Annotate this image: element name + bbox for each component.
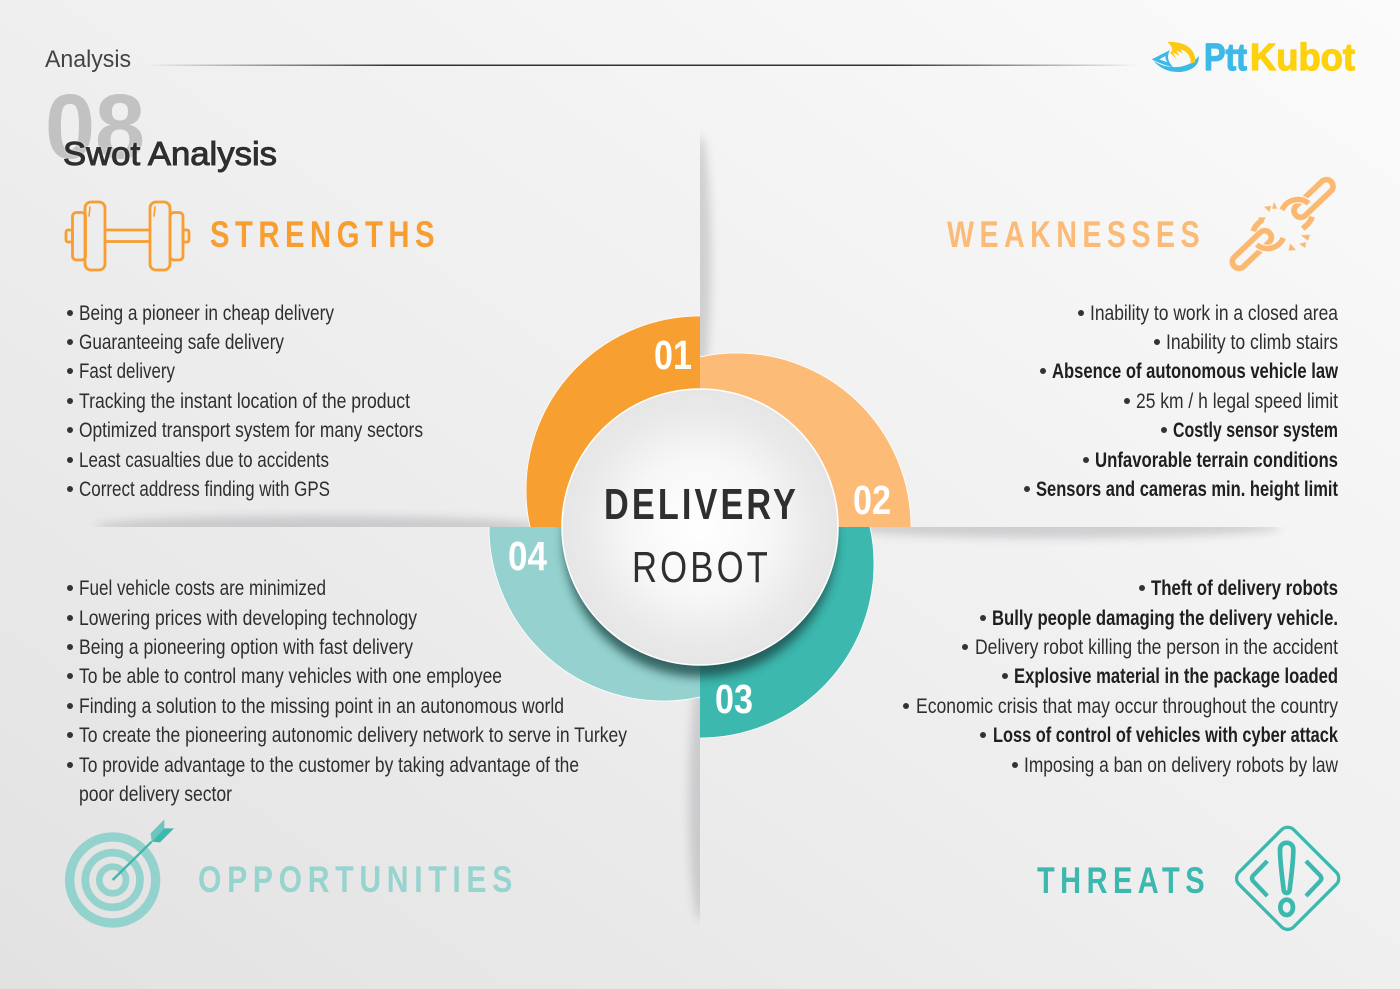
weaknesses list: Costly sensor system bbox=[1173, 418, 1338, 442]
segment 02 bbox=[700, 352, 912, 527]
opportunities list: To provide advantage to the customer by taking advantage of the bbox=[79, 753, 579, 777]
center diagram: four quadrant ring bbox=[489, 316, 911, 738]
icon: broken chain bbox=[1232, 180, 1333, 268]
heading: strengths: STRENGTHS bbox=[210, 214, 440, 255]
opportunities list: Finding a solution to the missing point in an autonomous world bbox=[79, 694, 564, 718]
weaknesses list: Inability to work in a closed area bbox=[1090, 301, 1338, 325]
strengths list: Guaranteeing safe delivery bbox=[79, 330, 284, 354]
strengths list: Fast delivery bbox=[79, 359, 175, 383]
heading: threats: THREATS bbox=[1037, 860, 1210, 901]
segment 02: 02 bbox=[853, 477, 891, 523]
header: section label: Analysis bbox=[45, 46, 131, 73]
opportunities list bbox=[67, 576, 627, 806]
section number: 08 bbox=[45, 76, 145, 178]
segment 01: 01 bbox=[654, 332, 692, 378]
segment 04: 04 bbox=[508, 533, 547, 579]
panel: strengths bbox=[66, 202, 440, 501]
logo icon bbox=[1152, 42, 1199, 72]
logo wordmark bbox=[1204, 37, 1355, 79]
strengths list: Correct address finding with GPS bbox=[79, 477, 330, 501]
strengths list: Tracking the instant location of the product bbox=[79, 389, 410, 413]
segment 01 bbox=[526, 316, 700, 527]
weaknesses list: Inability to climb stairs bbox=[1166, 330, 1338, 354]
header rule bbox=[147, 64, 1140, 66]
opportunities list: Being a pioneering option with fast delivery bbox=[79, 635, 413, 659]
segment 03: 03 bbox=[715, 676, 753, 722]
title: Swot Analysis bbox=[63, 135, 277, 172]
panel: weaknesses bbox=[947, 180, 1338, 501]
opportunities list: To create the pioneering autonomic delivery network to serve in Turkey bbox=[79, 723, 627, 747]
panel: opportunities bbox=[67, 576, 627, 923]
heading: weaknesses: WEAKNESSES bbox=[947, 214, 1205, 255]
icon: target with arrow bbox=[70, 819, 174, 923]
center title bbox=[604, 480, 799, 592]
panel: threats bbox=[903, 576, 1342, 933]
fold shadows between quadrants bbox=[95, 135, 1280, 920]
center title: DELIVERY bbox=[604, 480, 799, 529]
weaknesses list: Unfavorable terrain conditions bbox=[1095, 448, 1338, 472]
icon: warning diamond bbox=[1233, 824, 1342, 933]
segment 03 bbox=[700, 527, 874, 738]
threats list bbox=[903, 576, 1338, 777]
heading: opportunities: OPPORTUNITIES bbox=[198, 859, 518, 900]
segment 04 bbox=[488, 527, 700, 702]
opportunities list: poor delivery sector bbox=[79, 782, 232, 806]
central disc shadow bbox=[557, 527, 842, 684]
threats list: Theft of delivery robots bbox=[1151, 576, 1338, 600]
opportunities list: To be able to control many vehicles with one employee bbox=[79, 664, 502, 688]
logo wordmark: Ptt bbox=[1204, 37, 1247, 79]
opportunities list: Lowering prices with developing technology bbox=[79, 606, 417, 630]
strengths list: Optimized transport system for many sectors bbox=[79, 418, 423, 442]
logo: PttKubot bbox=[1152, 37, 1355, 79]
center title: ROBOT bbox=[632, 543, 771, 592]
strengths list: Least casualties due to accidents bbox=[79, 448, 329, 472]
strengths list: Being a pioneer in cheap delivery bbox=[79, 301, 334, 325]
strengths list bbox=[67, 301, 423, 501]
weaknesses list bbox=[1024, 301, 1338, 501]
logo wordmark: Kubot bbox=[1250, 37, 1355, 79]
central disc bbox=[562, 389, 838, 665]
opportunities list: Fuel vehicle costs are minimized bbox=[79, 576, 326, 600]
icon: dumbbell bbox=[66, 202, 189, 270]
weaknesses list: 25 km / h legal speed limit bbox=[1136, 389, 1338, 413]
